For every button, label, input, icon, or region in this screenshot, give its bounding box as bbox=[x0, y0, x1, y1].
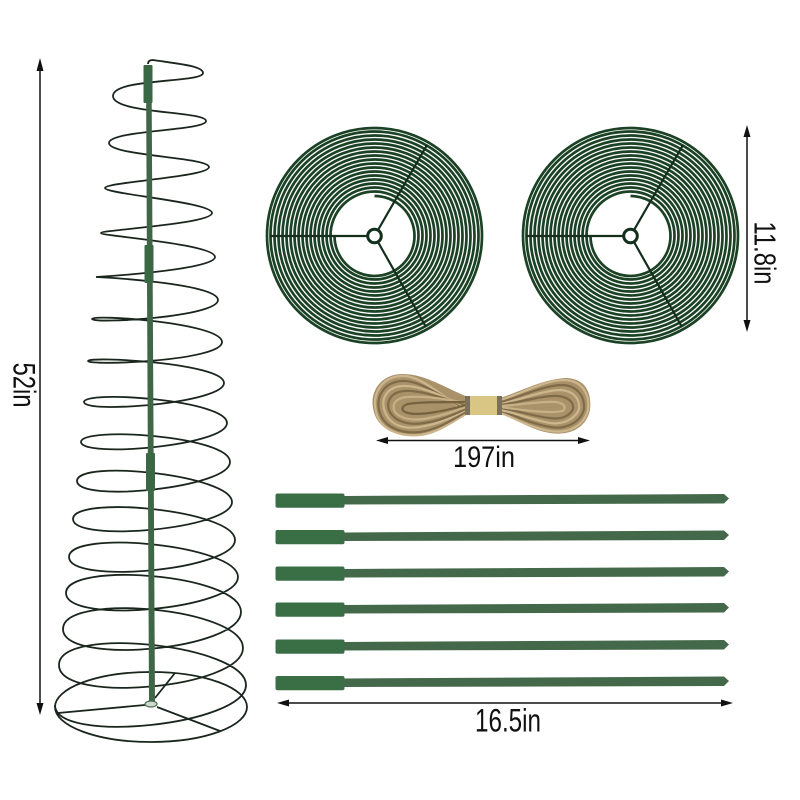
assembled spiral trellis tower bbox=[55, 60, 247, 742]
icon: coiled wire bbox=[523, 128, 738, 343]
twine length arrow bbox=[376, 437, 590, 444]
icon: coiled wire bbox=[267, 128, 482, 343]
stake 6 bbox=[276, 676, 729, 690]
left coiled ring disc bbox=[267, 128, 482, 343]
height arrow bbox=[36, 58, 44, 715]
green stakes group bbox=[276, 494, 729, 690]
icon: right twine loop bbox=[500, 378, 590, 434]
stake 5 bbox=[276, 640, 729, 654]
disc diameter arrow bbox=[744, 125, 750, 332]
icon: spokes and hub bbox=[526, 145, 683, 327]
right coiled ring disc bbox=[523, 128, 738, 343]
icon: spokes and hub bbox=[270, 145, 427, 327]
icon: green centre stem bbox=[144, 65, 157, 707]
icon: left twine loop bbox=[372, 374, 468, 436]
stake 3 bbox=[276, 566, 729, 581]
twine length label: 197in bbox=[453, 441, 515, 474]
stake 4 bbox=[276, 602, 729, 617]
icon: twine paper band bbox=[465, 396, 502, 415]
disc diameter label: 11.8in bbox=[747, 222, 782, 284]
height label: 52in bbox=[6, 362, 42, 408]
jute twine bundle bbox=[372, 374, 590, 436]
icon: spiral wire bbox=[55, 60, 246, 727]
stake length arrow bbox=[277, 700, 733, 706]
stake 1 bbox=[276, 494, 729, 508]
icon: base ring with spokes bbox=[55, 672, 247, 742]
stake length label: 16.5in bbox=[475, 702, 541, 738]
stake 2 bbox=[276, 530, 729, 544]
